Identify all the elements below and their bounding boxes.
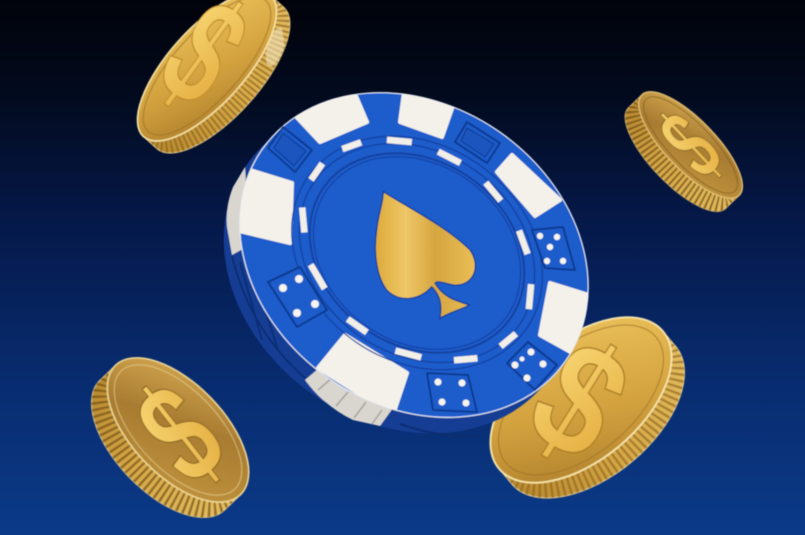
- inner rings: [246, 88, 588, 418]
- dice squares: [268, 122, 575, 412]
- white edge stripes: [235, 82, 595, 415]
- dice pips: [279, 233, 566, 406]
- white ring dashes: [302, 140, 531, 360]
- chip side wall: [160, 24, 652, 502]
- icon: gold spade: [375, 192, 475, 318]
- coin: bottom left: $: [109, 353, 252, 515]
- poker chip: [223, 91, 590, 437]
- chip top face: [176, 26, 652, 484]
- coin: top right: $: [639, 91, 743, 199]
- coin: bottom right: $: [501, 306, 657, 496]
